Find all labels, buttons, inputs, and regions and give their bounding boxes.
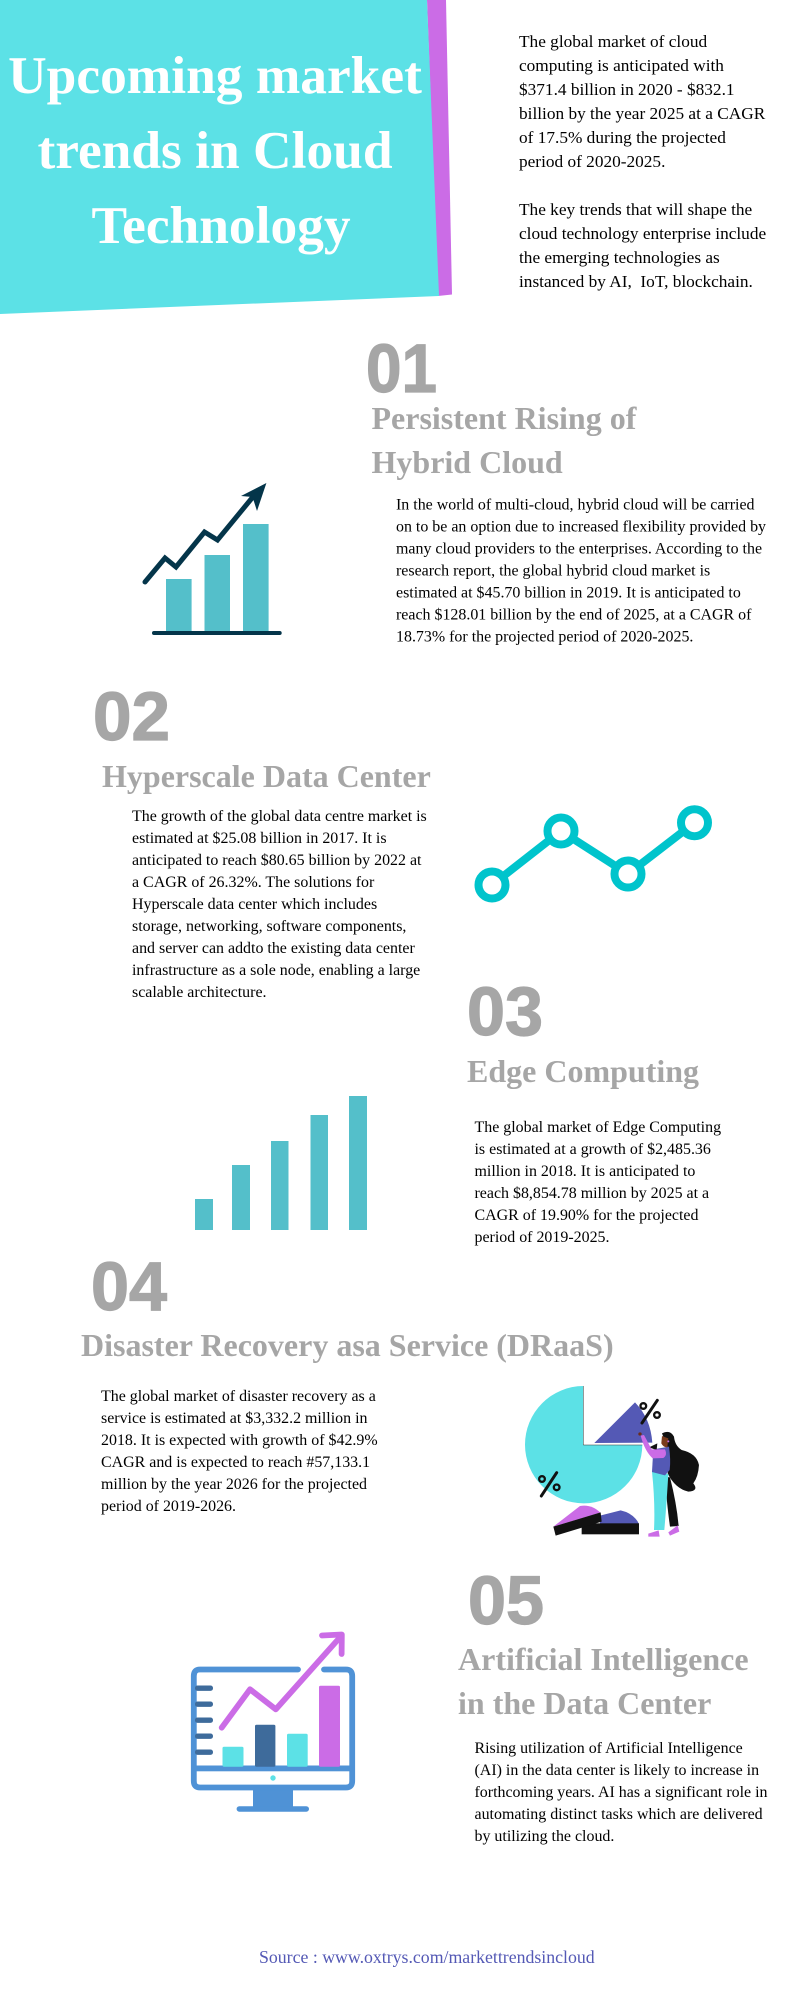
section 05 heading: in the Data Center <box>458 1685 711 1721</box>
section 03 body text: million in 2018. It is anticipated to <box>474 1163 695 1180</box>
section 01 body text: In the world of multi-cloud, hybrid cloud will be carried <box>396 496 755 514</box>
intro text: The key trends that will shape the <box>519 200 753 219</box>
section 01 body text: many cloud providers to the enterprises. According to the <box>396 540 762 558</box>
icon: rising bar chart with arrow <box>145 483 282 635</box>
section 03 heading: Edge Computing <box>467 1053 699 1089</box>
section 04 body text: CAGR and is expected to reach #57,133.1 <box>101 1454 370 1471</box>
section 01 number: 01 <box>366 330 437 407</box>
section 05 body text <box>474 1740 768 1845</box>
intro text: instanced by AI, IoT, blockchain. <box>519 272 753 291</box>
icon: monitor with chart and arrow <box>194 1634 352 1812</box>
title: trends in Cloud <box>37 120 393 180</box>
intro text: billion by the year 2025 at a CAGR <box>519 104 766 123</box>
source line: Source : www.oxtrys.com/markettrendsincloud <box>259 1947 595 1967</box>
intro text: the emerging technologies as <box>519 248 720 267</box>
section 02 body text: infrastructure as a sole node, enabling a large <box>132 962 420 979</box>
section 03 body text: is estimated at a growth of $2,485.36 <box>474 1141 711 1158</box>
section 03 body text: period of 2019-2025. <box>474 1229 610 1246</box>
section 05 heading <box>458 1641 749 1721</box>
section 05 body text: (AI) in the data center is likely to increase in <box>474 1762 759 1779</box>
section 01 body text: reach $128.01 billion by the end of 2025, at a CAGR of <box>396 606 752 624</box>
section 02 body text: Hyperscale data center which includes <box>132 896 377 913</box>
section 02 body text: scalable architecture. <box>132 984 266 1001</box>
section 04 body text: period of 2019-2026. <box>101 1498 236 1515</box>
fallen slices <box>600 1510 639 1524</box>
section 04 body text <box>101 1388 378 1515</box>
section 02 body text: The growth of the global data centre market is <box>132 808 427 825</box>
section 04 body text: 2018. It is expected with growth of $42.9% <box>101 1432 378 1449</box>
icon: five ascending bars <box>195 1096 367 1230</box>
title: Upcoming market <box>8 45 422 105</box>
section 03 number: 03 <box>467 973 543 1050</box>
section 02 heading: Hyperscale Data Center <box>102 758 431 794</box>
section 02 body text: anticipated to reach $80.65 billion by 2022 at <box>132 852 422 869</box>
section 05 body text: Rising utilization of Artificial Intelligence <box>474 1740 743 1757</box>
section 05 body text: forthcoming years. AI has a significant role in <box>474 1784 768 1801</box>
section 05 number: 05 <box>468 1562 544 1639</box>
section 02 body text <box>132 808 427 1001</box>
section 02 body text: storage, networking, software components, <box>132 918 406 935</box>
section 01 body text: 18.73% for the projected period of 2020-2025. <box>396 628 693 646</box>
icon: line chart with circular nodes <box>478 809 708 898</box>
section 04 body text: million by the year 2026 for the projected <box>101 1476 367 1493</box>
section 01 body text: research report, the global hybrid cloud market is <box>396 562 710 580</box>
section 01 body text <box>396 496 766 646</box>
section 01 heading: Persistent Rising of <box>372 400 637 436</box>
section 03 body text <box>474 1119 721 1246</box>
section 02 body text: estimated at $25.08 billion in 2017. It is <box>132 830 387 847</box>
intro text: of 17.5% during the projected <box>519 128 726 147</box>
section 04 body text: service is estimated at $3,332.2 million in <box>101 1410 367 1427</box>
section 05 body text: automating distinct tasks which are delivered <box>474 1806 763 1823</box>
intro text: The global market of cloud <box>519 32 707 51</box>
title: Technology <box>91 195 351 255</box>
section 02 body text: and server can addto the existing data center <box>132 940 415 957</box>
pie chart <box>525 1386 642 1503</box>
intro text: cloud technology enterprise include <box>519 224 766 243</box>
pie slice <box>594 1402 652 1443</box>
section 02 number: 02 <box>93 678 170 755</box>
title <box>8 45 422 255</box>
section 01 heading: Hybrid Cloud <box>372 444 563 480</box>
section 04 body text: The global market of disaster recovery as a <box>101 1388 376 1405</box>
woman <box>662 1432 699 1492</box>
section 01 body text: on to be an option due to increased flexibility provided by <box>396 518 766 536</box>
section 02 body text: a CAGR of 26.32%. The solutions for <box>132 874 375 891</box>
percent signs <box>539 1400 660 1496</box>
section 04 number: 04 <box>91 1248 167 1325</box>
section 04 heading: Disaster Recovery asa Service (DRaaS) <box>81 1327 614 1363</box>
section 05 body text: by utilizing the cloud. <box>474 1828 614 1845</box>
header banner <box>0 0 452 314</box>
section 05 heading: Artificial Intelligence <box>458 1641 749 1677</box>
intro text: $371.4 billion in 2020 - $832.1 <box>519 80 735 99</box>
intro text: period of 2020-2025. <box>519 152 665 171</box>
section 03 body text: reach $8,854.78 million by 2025 at a <box>474 1185 709 1202</box>
section 01 heading <box>372 400 637 480</box>
section 03 body text: CAGR of 19.90% for the projected <box>474 1207 698 1224</box>
icon: woman with pie chart <box>525 1386 699 1537</box>
intro text <box>519 32 766 291</box>
section 03 body text: The global market of Edge Computing <box>474 1119 721 1136</box>
intro text: computing is anticipated with <box>519 56 724 75</box>
section 01 body text: estimated at $45.70 billion in 2019. It is anticipated to <box>396 584 741 602</box>
